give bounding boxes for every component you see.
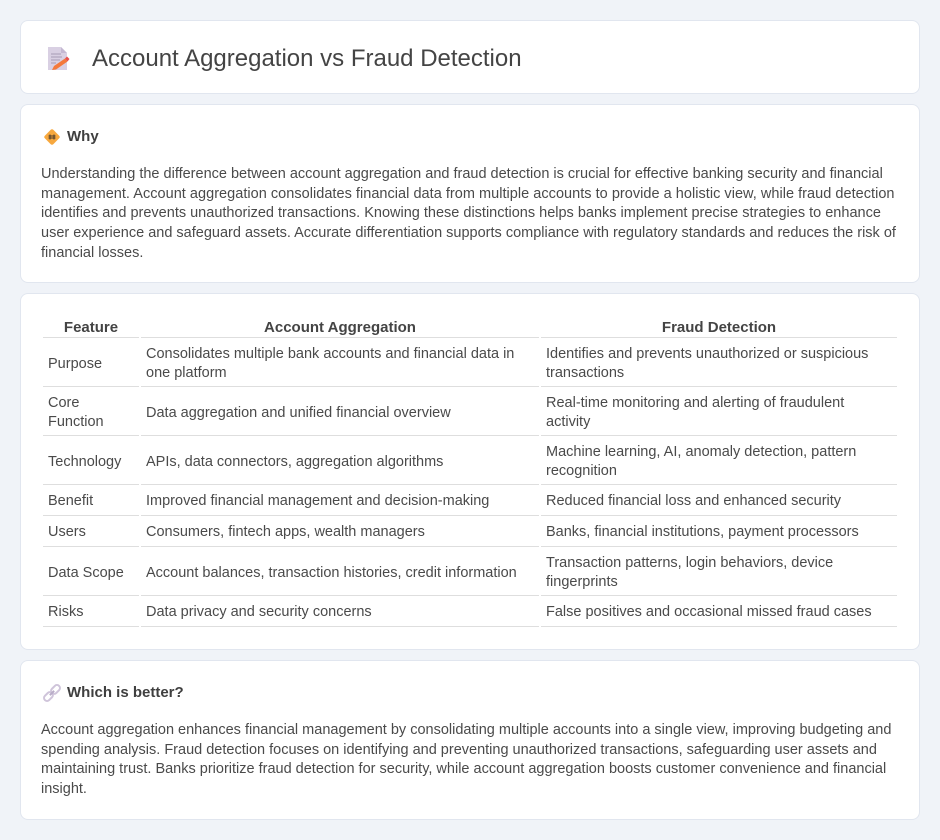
row: risks (48, 604, 872, 620)
row: technology: APIs, data connectors, aggregation algorithms (146, 454, 443, 470)
row: risks: Risks (48, 604, 83, 620)
row: purpose: Purpose (48, 356, 102, 372)
text: why paragraph: management. Account aggregation consolidates financial data from multiple accounts to provide a holistic view, while fraud detection (41, 186, 895, 202)
row: technology: Machine learning, AI, anomaly detection, pattern (546, 444, 856, 460)
row: core function: Core (48, 395, 79, 411)
row: benefit: Benefit (48, 493, 93, 509)
row: users (48, 524, 859, 540)
table header: Account Aggregation (264, 319, 416, 336)
row: data scope: Account balances, transaction histories, credit information (146, 565, 517, 581)
row: technology (48, 444, 856, 479)
row: data scope: Data Scope (48, 565, 124, 581)
row: users: Consumers, fintech apps, wealth managers (146, 524, 425, 540)
text: why paragraph: identifies and prevents unauthorized transactions. Knowing these distinctions helps banks implement precise strategies to enhance (41, 205, 881, 221)
row: technology: Technology (48, 454, 121, 470)
row: data scope (48, 555, 833, 590)
row: purpose (48, 346, 868, 381)
row: data scope: fingerprints (546, 574, 618, 590)
text: why paragraph (41, 166, 896, 260)
table header: Feature (64, 319, 118, 336)
row: purpose: transactions (546, 365, 624, 381)
row: benefit: Reduced financial loss and enhanced security (546, 493, 841, 509)
row: core function (48, 395, 844, 430)
row: core function: Function (48, 414, 104, 430)
text: which is better paragraph: insight. (41, 780, 87, 796)
row: users: Banks, financial institutions, payment processors (546, 524, 859, 540)
row: benefit: Improved financial management and decision-making (146, 493, 489, 509)
panel: which is better (20, 660, 920, 820)
panel: header (20, 20, 920, 94)
row: purpose: Consolidates multiple bank accounts and financial data in (146, 346, 514, 362)
icon: document with pencil (48, 47, 70, 70)
heading: why: Why (67, 128, 99, 145)
text: which is better paragraph: maintaining trust. Banks prioritize fraud detection for security, while account aggregation boosts customer convenience and financial (41, 761, 886, 777)
text: which is better paragraph (41, 722, 891, 796)
row: purpose: one platform (146, 365, 227, 381)
icon: warning diamond (44, 129, 60, 145)
row: technology: recognition (546, 463, 617, 479)
row: core function: Data aggregation and unified financial overview (146, 405, 451, 421)
icon: chain link (43, 684, 61, 702)
row: core function: activity (546, 414, 590, 430)
table header (64, 319, 776, 336)
text: why paragraph: user experience and safeguard assets. Accurate differentiation supports compliance with regulatory standards and reduces the risk of (41, 224, 896, 240)
text: why paragraph: financial losses. (41, 244, 143, 260)
row: risks: False positives and occasional missed fraud cases (546, 604, 872, 620)
row: risks: Data privacy and security concerns (146, 604, 372, 620)
row: users: Users (48, 524, 86, 540)
row: data scope: Transaction patterns, login behaviors, device (546, 555, 833, 571)
text: which is better paragraph: spending analysis. Fraud detection focuses on identifying and preventing unauthorized transactions, safeguarding user assets and (41, 742, 877, 758)
panel: comparison table (20, 293, 920, 650)
title: Account Aggregation vs Fraud Detection (92, 45, 522, 72)
panel: why (20, 104, 920, 283)
row: purpose: Identifies and prevents unauthorized or suspicious (546, 346, 868, 362)
text: why paragraph: Understanding the difference between account aggregation and fraud detection is crucial for effective banking security and financial (41, 166, 883, 182)
heading: which is better: Which is better? (67, 684, 184, 701)
row: benefit (48, 493, 841, 509)
row: core function: Real-time monitoring and alerting of fraudulent (546, 395, 844, 411)
text: which is better paragraph: Account aggregation enhances financial management by consolidating multiple accounts into a single view, improving budgeting and (41, 722, 891, 738)
table header: Fraud Detection (662, 319, 776, 336)
